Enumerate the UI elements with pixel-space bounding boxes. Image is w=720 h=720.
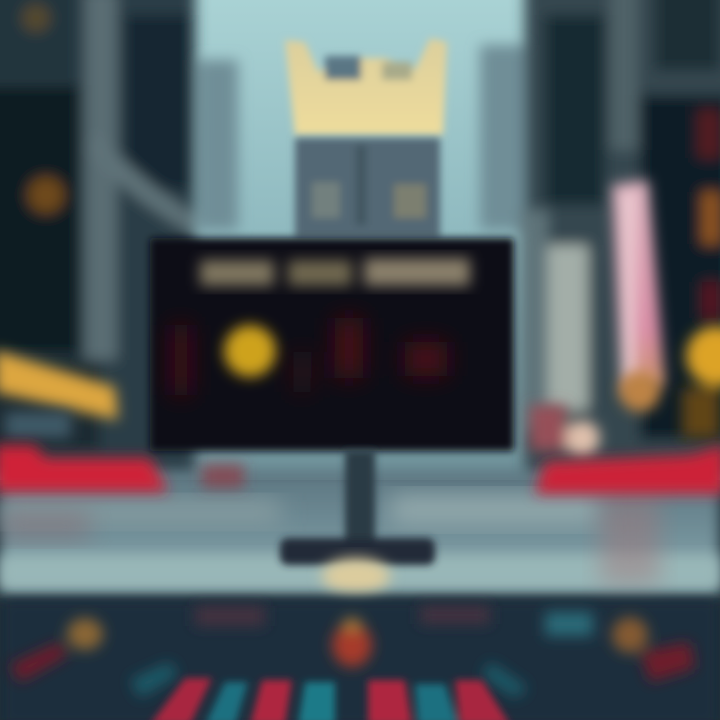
left red band [0, 445, 244, 492]
billboard headline [200, 258, 470, 286]
left buildings [0, 0, 238, 480]
ground plane [0, 470, 720, 595]
distant tower [295, 138, 440, 238]
billboard screen [150, 238, 514, 451]
bottom color stripes [150, 678, 510, 720]
right red band [535, 445, 720, 494]
lower dark panel [0, 598, 720, 720]
dark red chart marks [172, 318, 447, 395]
lower street lights [5, 372, 660, 456]
billboard stand [280, 450, 435, 565]
right yellow lamp [682, 326, 720, 438]
right buildings [480, 0, 720, 480]
cream base glow [322, 558, 390, 594]
pink tower sign [612, 180, 665, 395]
crown on distant tower [285, 38, 447, 135]
lower panel colored marks [10, 606, 695, 698]
yellow sign on left [0, 350, 118, 420]
background sky [0, 0, 720, 480]
yellow coin icon [224, 325, 276, 377]
